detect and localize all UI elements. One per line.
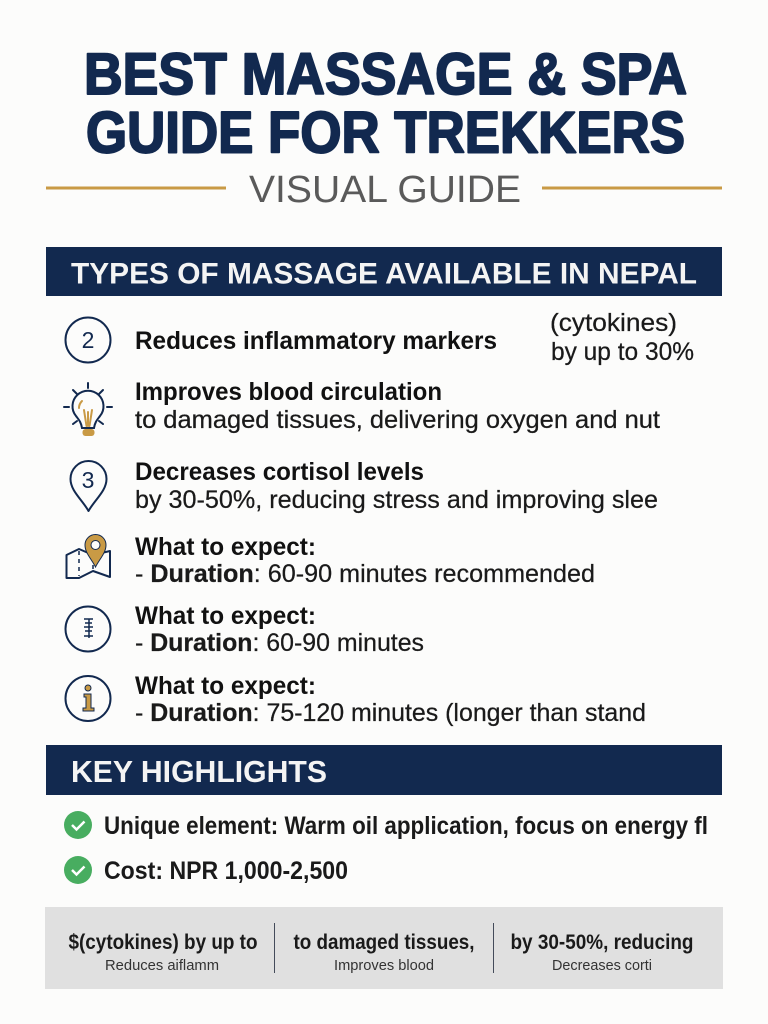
list item: blood circulation bbox=[64, 378, 660, 436]
heading: key highlights: KEY HIGHLIGHTS bbox=[71, 754, 327, 789]
stats panel bbox=[45, 907, 723, 989]
list item: what to expect, 60-90 minutes: What to expect: bbox=[135, 602, 316, 630]
stat: 30-50%: Decreases corti bbox=[552, 957, 652, 974]
icon: numbered circle 2 bbox=[66, 318, 110, 362]
list item: what to expect, 60-90 minutes recommended bbox=[66, 533, 595, 588]
stat: 30-50% bbox=[510, 931, 694, 974]
heading: types of massage bbox=[46, 247, 722, 296]
title: BEST MASSAGE & SPA bbox=[84, 42, 687, 107]
title bbox=[84, 42, 687, 166]
stat: cytokines: $(cytokines) by up to bbox=[68, 931, 258, 954]
list item: inflammatory markers: (cytokines) bbox=[550, 309, 677, 337]
title: GUIDE FOR TREKKERS bbox=[86, 100, 685, 166]
stat: damaged tissues bbox=[294, 931, 474, 974]
heading: types of massage: TYPES OF MASSAGE AVAILABLE IN NEPAL bbox=[71, 258, 697, 290]
list item: inflammatory markers bbox=[66, 309, 694, 366]
icon: numbered circle 2: 2 bbox=[82, 327, 94, 353]
subtitle: visual guide: VISUAL GUIDE bbox=[249, 169, 521, 211]
list item: what to expect, 75-120 minutes: What to expect: bbox=[135, 672, 316, 700]
icon: green check bbox=[64, 856, 92, 884]
list item: cortisol: Decreases cortisol levels bbox=[135, 458, 424, 486]
stat: damaged tissues: Improves blood bbox=[334, 957, 434, 974]
list item: what to expect, 60-90 minutes recommended: - Duration: 60-90 minutes recommended bbox=[135, 560, 595, 588]
heading: key highlights bbox=[46, 745, 722, 795]
highlight: unique element: Unique element: Warm oil application, focus on energy fl bbox=[104, 812, 708, 840]
list item: cortisol bbox=[70, 458, 658, 514]
list item: inflammatory markers: Reduces inflammatory markers bbox=[135, 327, 497, 355]
list item: inflammatory markers: by up to 30% bbox=[551, 338, 694, 366]
stat: cytokines: Reduces aiflamm bbox=[105, 957, 219, 974]
highlight: cost: Cost: NPR 1,000-2,500 bbox=[104, 857, 348, 885]
icon: map pin 3: 3 bbox=[82, 467, 94, 493]
stat: damaged tissues: to damaged tissues, bbox=[294, 931, 474, 954]
list item: what to expect, 60-90 minutes bbox=[66, 602, 424, 657]
stat: cytokines bbox=[68, 931, 258, 974]
list item: cortisol: by 30-50%, reducing stress and improving slee bbox=[135, 486, 658, 514]
icon: green check bbox=[64, 811, 92, 839]
stat: 30-50%: by 30-50%, reducing bbox=[510, 931, 694, 954]
list item: blood circulation: Improves blood circulation bbox=[135, 378, 442, 406]
list item: what to expect, 60-90 minutes recommended: What to expect: bbox=[135, 533, 316, 561]
list item: what to expect, 75-120 minutes bbox=[66, 672, 646, 727]
subtitle: visual guide bbox=[46, 169, 722, 211]
list item: what to expect, 75-120 minutes: - Duration: 75-120 minutes (longer than stand bbox=[135, 699, 646, 727]
icon: circle with glyph bbox=[66, 606, 110, 652]
list item: what to expect, 60-90 minutes: - Duration: 60-90 minutes bbox=[135, 629, 424, 657]
icon: light bulb bbox=[64, 383, 112, 436]
icon: map with gold pin bbox=[66, 534, 110, 578]
list item: blood circulation: to damaged tissues, delivering oxygen and nut bbox=[135, 406, 660, 434]
icon: info circle bbox=[66, 676, 110, 721]
icon: map pin 3 bbox=[70, 461, 106, 511]
